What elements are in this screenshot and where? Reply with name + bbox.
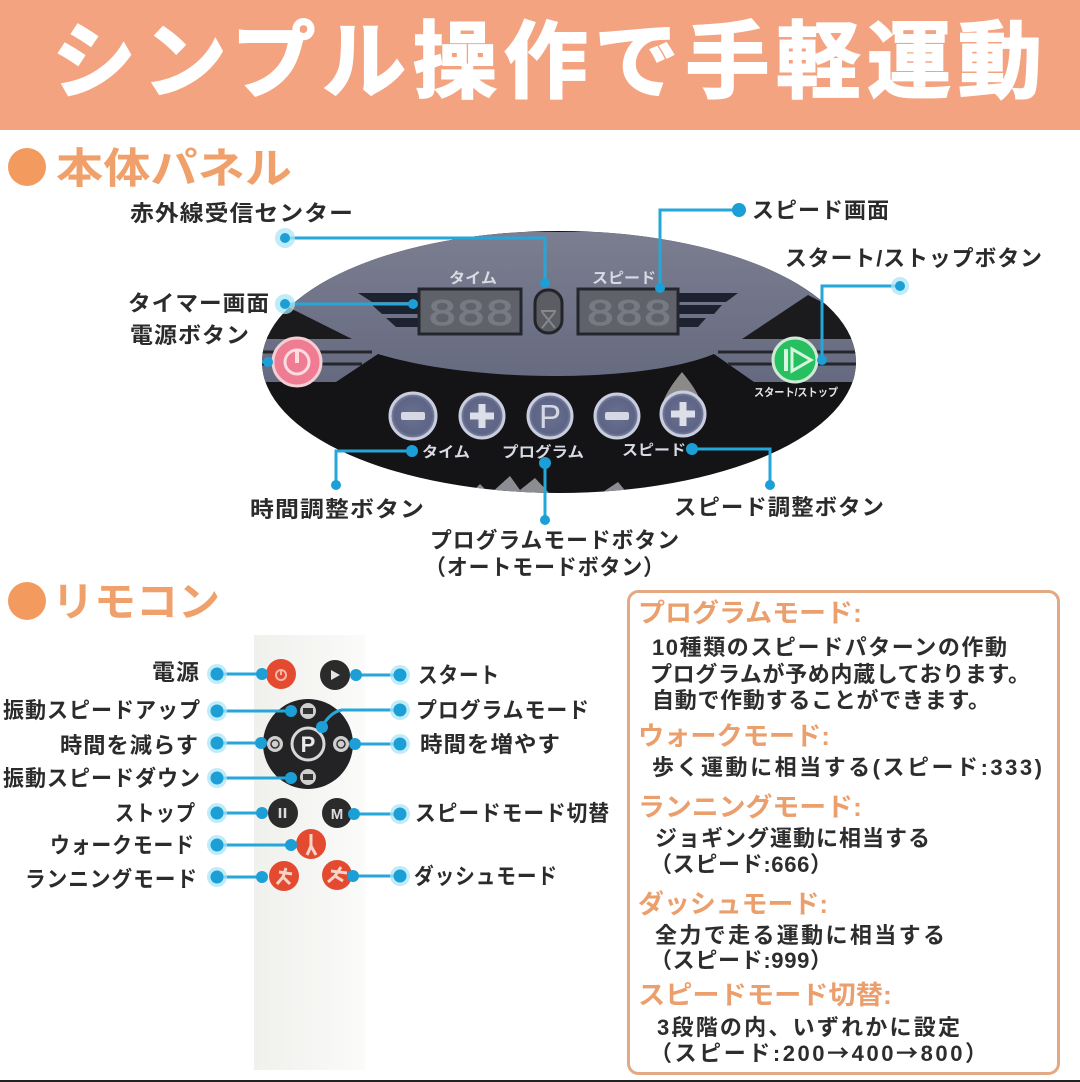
remote labels: スピードモード切替 [415,801,610,826]
label: time on panel: タイム [449,270,497,287]
panel callout labels: 電源ボタン [130,323,250,348]
remote labels: ウォークモード [50,833,195,858]
remote labels: ダッシュモード [414,864,558,889]
timer display [419,289,521,337]
program button: P [539,398,561,435]
panel label: speed: スピード [622,442,686,459]
remote labels: スタート [418,663,500,688]
heading: body panel: 本体パネル [56,145,292,192]
speed mode switch description: （スピード:200→400→800） [650,1036,987,1068]
walk mode description: 歩く運動に相当する(スピード:333) [652,755,1042,780]
program mode description: 10種類のスピードパターンの作動 [652,635,1007,660]
remote labels: プログラムモード [416,698,590,723]
panel callout labels: スピード画面 [752,198,890,223]
program mode description [638,598,1030,713]
running mode description: ランニングモード: [638,792,862,822]
remote dial [263,699,353,789]
dash mode description: 全力で走る運動に相当する [655,923,945,948]
mode description panel [628,592,1058,1074]
dash mode description: （スピード:999） [650,948,832,973]
program mode description: プログラムモード: [638,598,862,628]
speed mode switch description [638,980,987,1068]
program button [528,394,572,438]
control panel oval [262,231,857,494]
label: speed on panel: スピード [592,270,656,287]
panel label: start stop: スタート/ストップ [754,386,838,399]
remote play button [320,660,350,690]
panel callout labels: 赤外線受信センター [130,201,354,226]
remote dash button [322,860,352,890]
remote labels: 電源 [152,660,200,685]
speed minus button [595,394,639,438]
power button [273,338,321,386]
speed display [578,289,678,337]
program mode description: 自動で作動することができます。 [652,688,990,713]
remote labels [3,660,610,892]
panel callout labels: タイマー画面 [128,291,270,316]
title banner [0,0,1080,130]
panel label: time: タイム [422,444,470,461]
panel callout labels: （オートモードボタン） [425,555,665,580]
remote run button [269,861,299,891]
program mode description: プログラムが予め内蔵しております。 [650,662,1030,687]
callouts: panel [262,203,909,525]
walk mode description: ウォークモード: [638,721,830,751]
remote labels: 振動スピードダウン [3,766,201,791]
panel callout labels: スタート/ストップボタン [785,246,1043,271]
speed up marker [660,372,705,412]
panel callout labels: 時間調整ボタン [250,497,425,522]
time plus button [460,394,504,438]
remote labels: 振動スピードアップ [3,698,201,723]
remote labels: ストップ [115,801,196,826]
start stop button [773,338,817,382]
running mode description: ジョギング運動に相当する [655,826,930,851]
infrared sensor [535,290,562,333]
wing stripes right [678,293,738,327]
running mode description: （スピード:666） [650,852,832,877]
dash mode description [638,889,945,973]
remote labels: 時間を減らす [60,733,199,758]
remote stop button [268,798,298,828]
speed plus button [661,392,705,436]
panel label: program: プログラム [502,443,584,461]
panel callout labels: プログラムモードボタン [430,528,680,553]
panel callout labels: スピード調整ボタン [674,495,885,520]
callouts: remote [207,664,410,887]
walk mode description [638,721,1042,780]
remote labels: 時間を増やす [420,732,561,757]
timer display: 888 [428,295,514,337]
speed display: 888 [586,295,672,337]
running mode description [638,792,930,877]
remote mode button [322,798,352,828]
remote control [254,635,365,1070]
remote walk button [296,829,326,859]
wing stripes left [358,293,418,327]
remote power button [266,659,296,689]
time minus button [390,393,436,439]
remote labels: ランニングモード [25,867,198,892]
remote mode button: M [331,806,343,823]
speed mode switch description: スピードモード切替: [638,980,892,1010]
title banner: シンプル操作で手軽運動 [52,15,1042,109]
dash mode description: ダッシュモード: [638,889,828,919]
heading: remote: リモコン [52,579,220,625]
speed mode switch description: 3段階の内、いずれかに設定 [657,1015,960,1040]
panel callout labels [128,198,1043,580]
remote dial: P [301,732,315,757]
